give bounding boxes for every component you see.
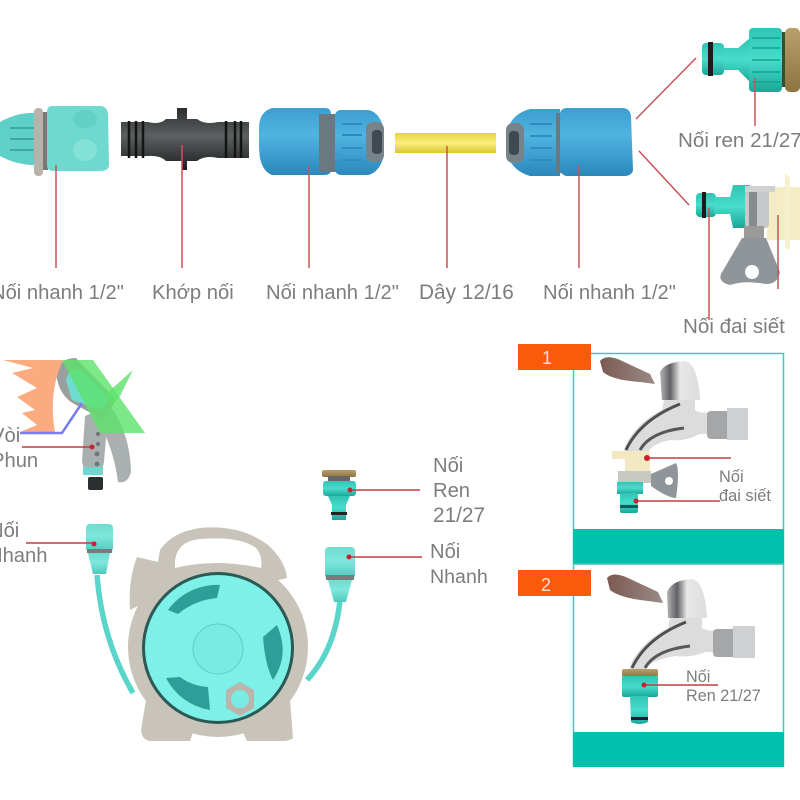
badge: 1 xyxy=(518,344,591,370)
connector: teal quick connector xyxy=(0,106,109,176)
icon: watermark logo xyxy=(3,360,145,433)
icon: spray gun xyxy=(56,358,131,490)
bar: teal caption xyxy=(573,529,784,564)
label: thread adapter: Ren xyxy=(433,480,470,502)
label: left quick connector xyxy=(0,520,96,567)
bar: teal caption xyxy=(573,732,784,767)
panel: installation step 2 xyxy=(518,564,784,767)
frame xyxy=(574,564,784,766)
leader lines xyxy=(56,58,778,320)
label: clamp adapter callout: Nối xyxy=(719,468,744,486)
label: right quick connector: Nhanh xyxy=(430,566,488,588)
frame xyxy=(574,354,784,564)
panel: hose reel set xyxy=(0,358,488,741)
icon: thread adapter xyxy=(322,470,356,520)
label: clamp adapter: Nối đai siết xyxy=(683,315,785,338)
badge: 2: 2 xyxy=(541,575,551,595)
label: thread adapter callout: Ren 21/27 xyxy=(686,687,761,705)
label: hose: Dây 12/16 xyxy=(419,281,514,304)
label: thread adapter callout xyxy=(642,668,761,705)
label: clamp adapter callout xyxy=(634,455,771,505)
connector: yellow hose xyxy=(395,133,496,153)
label: spray nozzle xyxy=(0,425,94,472)
connector: thread adapter 21/27 xyxy=(702,28,800,92)
label: thread adapter: 21/27 xyxy=(433,504,485,527)
label: right quick connector: Nối xyxy=(430,541,460,563)
label: thread adapter: Nối ren 21/27 xyxy=(678,129,800,152)
label: clamp adapter callout: đai siết xyxy=(719,487,771,505)
label: quick connector 3: Nối nhanh 1/2" xyxy=(543,282,676,304)
label: joint: Khớp nối xyxy=(152,282,234,304)
connector: clamp adapter with key xyxy=(696,173,800,285)
icon: hose reel xyxy=(128,527,308,741)
connector: blue quick connector left xyxy=(259,108,384,175)
panel: connector parts diagram xyxy=(0,28,800,338)
label: thread adapter xyxy=(348,455,485,527)
icon: left quick connector and hose xyxy=(86,524,133,693)
label: thread adapter callout: Nối xyxy=(686,668,710,686)
connector: black double joint xyxy=(121,108,249,170)
panel: installation step 1 xyxy=(518,344,784,564)
label: quick connector 2: Nối nhanh 1/2" xyxy=(266,282,399,304)
badge: 2 xyxy=(518,570,591,596)
label: thread adapter: Nối xyxy=(433,455,463,477)
badge: 1: 1 xyxy=(542,348,552,368)
icon: faucet with clamp adapter xyxy=(600,357,748,513)
label: right quick connector xyxy=(346,541,488,588)
connector: blue quick connector right xyxy=(506,108,633,176)
icon: right quick connector and hose xyxy=(307,547,355,680)
icon: faucet with thread adapter xyxy=(607,574,755,724)
